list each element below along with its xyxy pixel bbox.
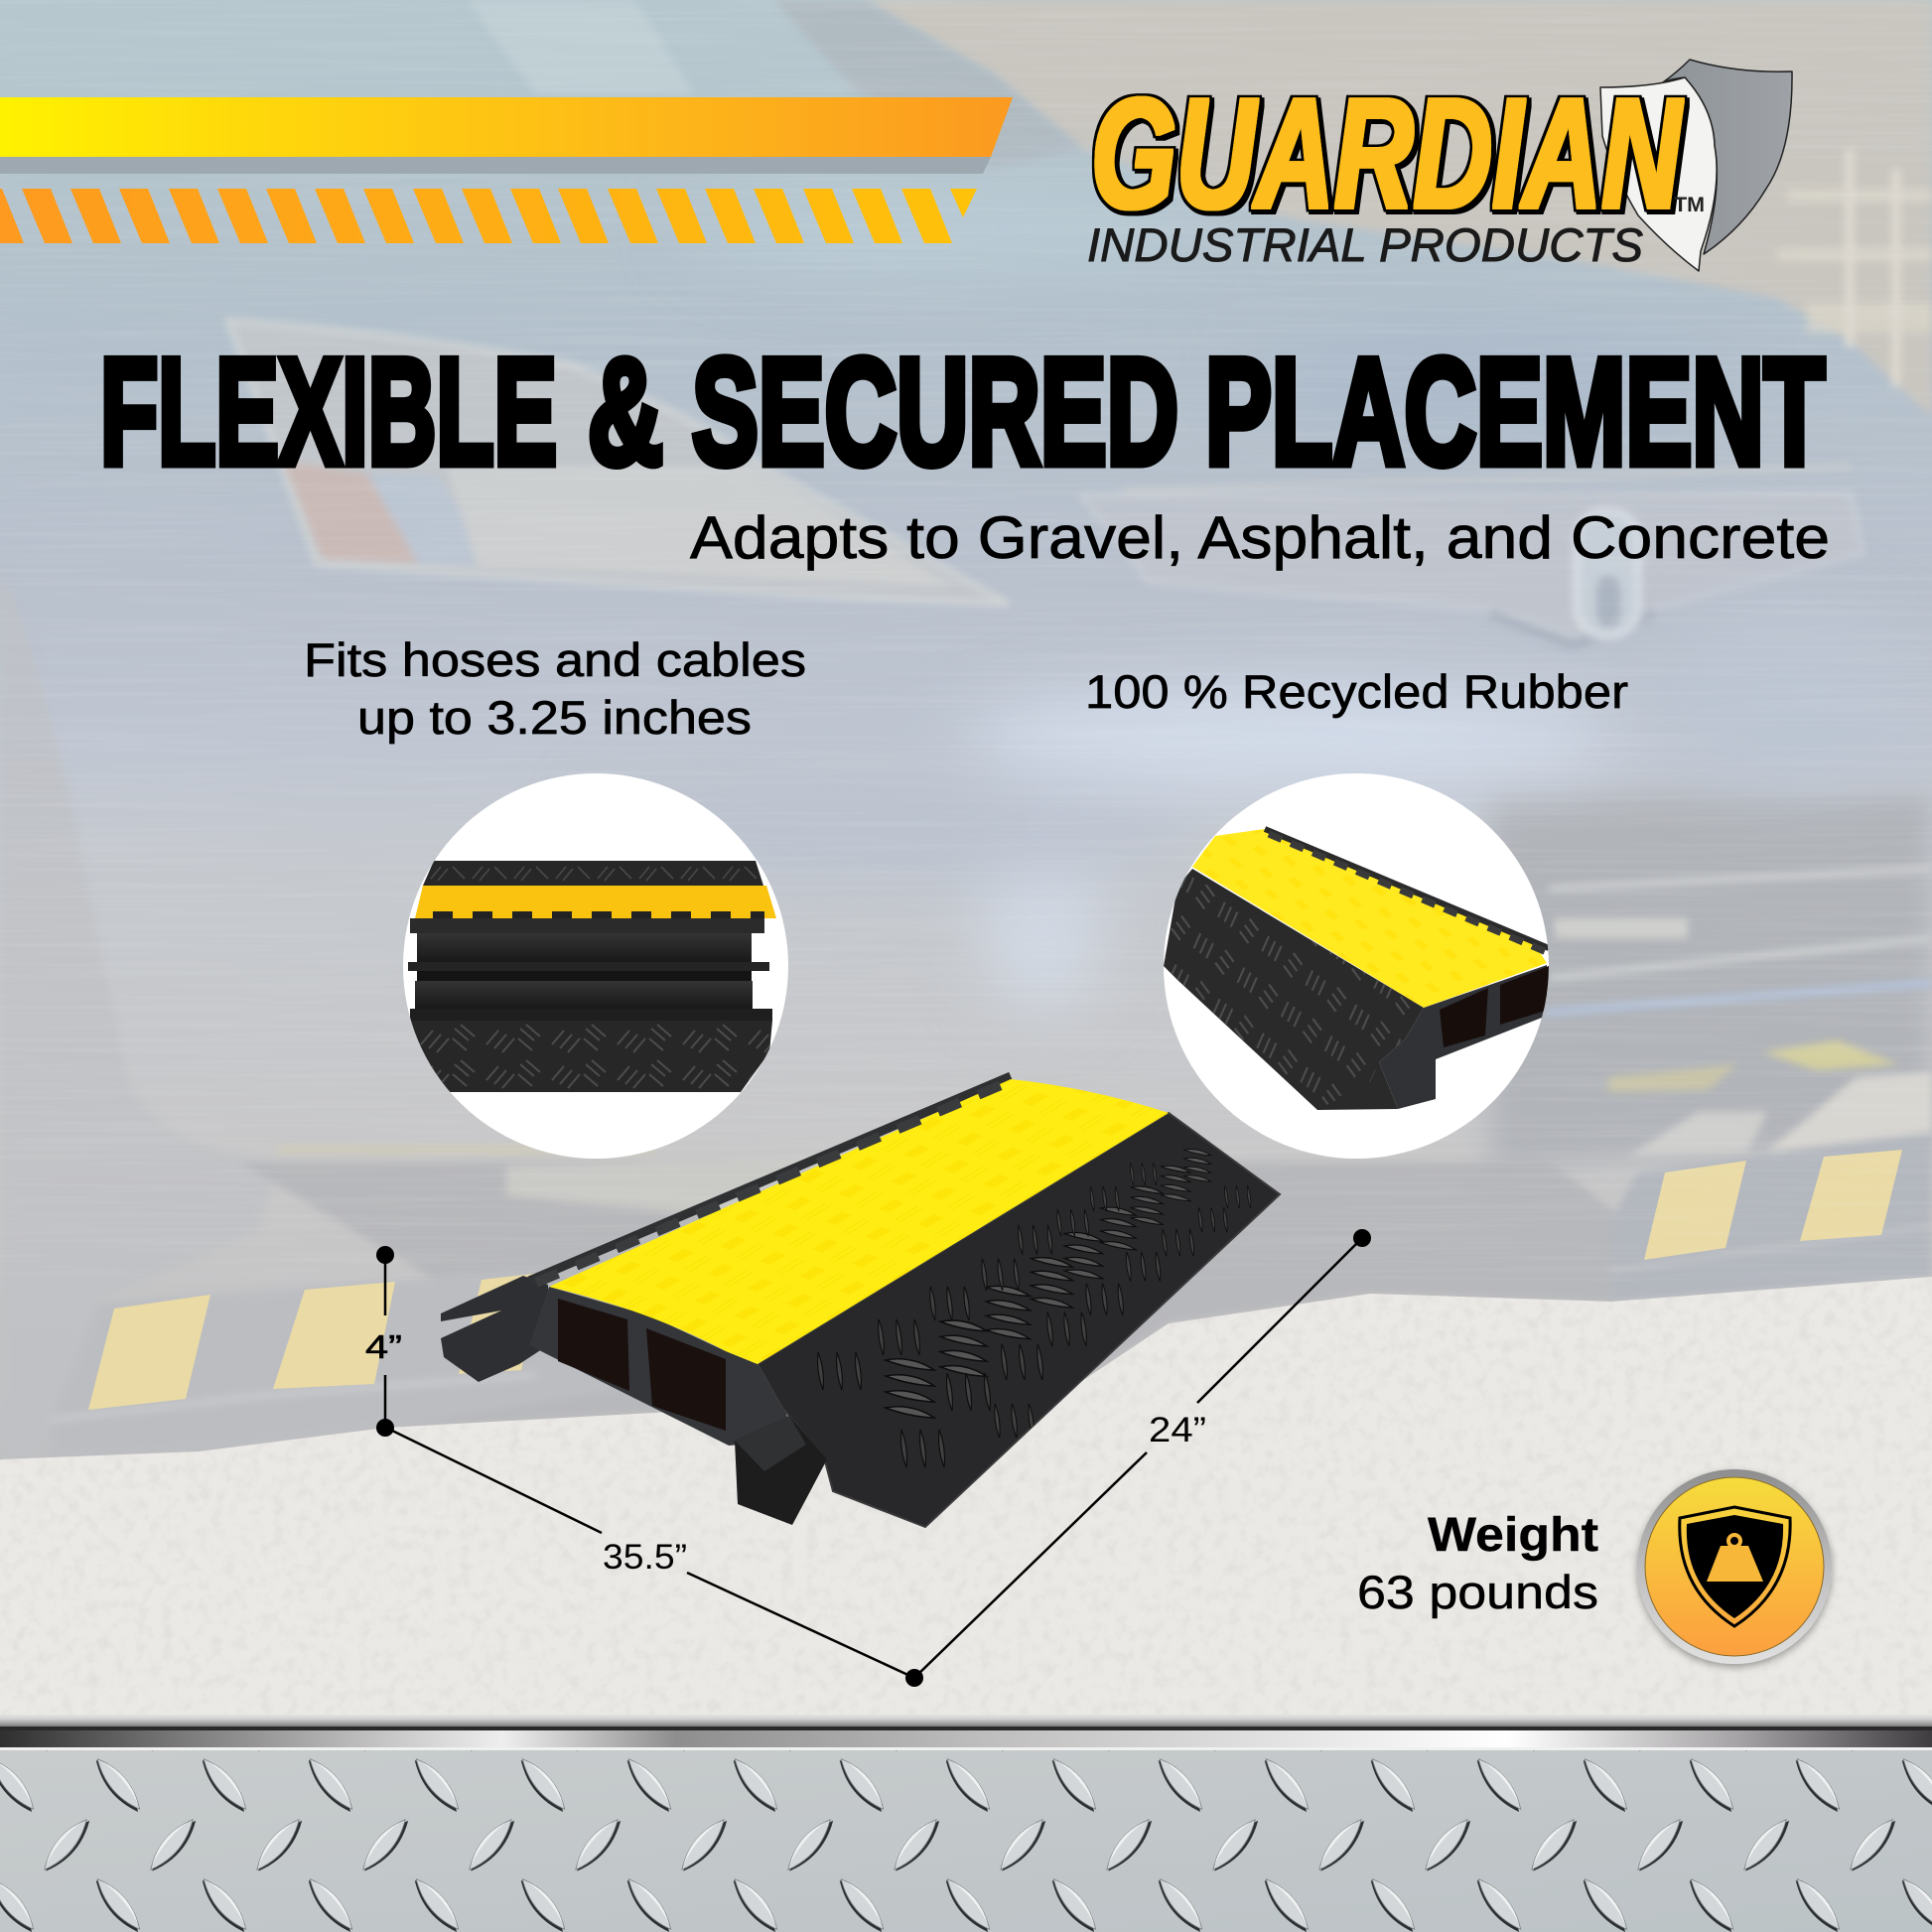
headlight [228,321,1008,604]
cable holes [1440,988,1488,1047]
left connector [441,1276,548,1382]
right connector [735,1416,827,1525]
curb yellow stripes [88,1150,1902,1410]
main product photo: cable protector ramp [441,1076,1280,1527]
diamond plate footer [0,1750,1932,1932]
yellow cover [1192,829,1547,1008]
title [100,328,1825,496]
logo wordmark: GUARDIAN [1091,67,1683,241]
lower rib [410,1009,772,1021]
logo tagline: INDUSTRIAL PRODUCTS [1087,218,1643,271]
grille [1081,467,1863,645]
gravel ground [0,1277,1932,1718]
cable channel 1 [417,933,752,962]
photo circle: product top view [403,773,788,1159]
title: & [588,328,663,496]
left kerb [50,1271,616,1459]
icon: weight on shield badge [1637,1469,1832,1664]
feature text: recycled rubber: 100 % Recycled Rubber [1085,665,1628,718]
cable channel holes [558,1299,629,1391]
black diamond-plate ramp [758,1113,1280,1527]
lower tread panel [410,1021,772,1092]
title: SECURED [692,328,1178,496]
dimension: length 24 inches [905,1229,1371,1687]
weight text [1357,1509,1598,1618]
logo shield [1600,60,1792,271]
metallic divider bar [0,1715,1932,1750]
yellow cable cover [549,1079,1169,1364]
dimension: height 4 inches [365,1246,402,1428]
dimension: width 35.5 inches: 35.5” [603,1538,687,1577]
logo: Guardian Industrial Products [1087,60,1792,271]
top tread panel [423,861,763,886]
dimension: height 4 inches: 4” [365,1328,402,1365]
end face [1379,965,1547,1109]
weight text: 63 pounds [1357,1566,1598,1618]
trademark: TM [1674,194,1705,216]
notched edge [410,911,764,918]
dimension: width 35.5 inches [376,1419,914,1678]
feature text: hoses and cables: up to 3.25 inches [357,691,752,744]
yellow header bar [0,97,1013,174]
fence rails [1777,149,1932,387]
white kerb strip under bumper [506,1157,1052,1291]
cable channel 2 [415,981,753,1009]
feature text: hoses and cables: Fits hoses and cables [304,633,806,686]
soft highlights on car body [596,189,1906,1013]
photo circle: product angled view [1164,773,1549,1159]
notched back edge [1265,829,1549,948]
yellow cover [415,886,776,918]
subtitle: Adapts to Gravel, Asphalt, and Concrete [690,504,1830,571]
hazard stripes [0,189,977,243]
centre rib [408,962,769,971]
dimension: length 24 inches: 24” [1149,1411,1206,1449]
trees and fence behind the car [864,0,1932,417]
weight text: Weight [1428,1509,1598,1562]
front end face [529,1287,797,1446]
title: FLEXIBLE [100,328,557,496]
right kerb [1610,1132,1932,1302]
lower bumper on the right, blended [1489,794,1932,1172]
windshield shading [635,0,1082,169]
crosswalk block at far right [1767,1072,1932,1152]
wheel arch [0,566,278,1459]
lower body shadow [238,1162,1628,1428]
hinge teeth overlay [536,1080,1013,1283]
back edge hinge teeth [529,1076,1011,1281]
black ramp [1164,869,1424,1110]
feature text: hoses and cables [304,633,806,744]
